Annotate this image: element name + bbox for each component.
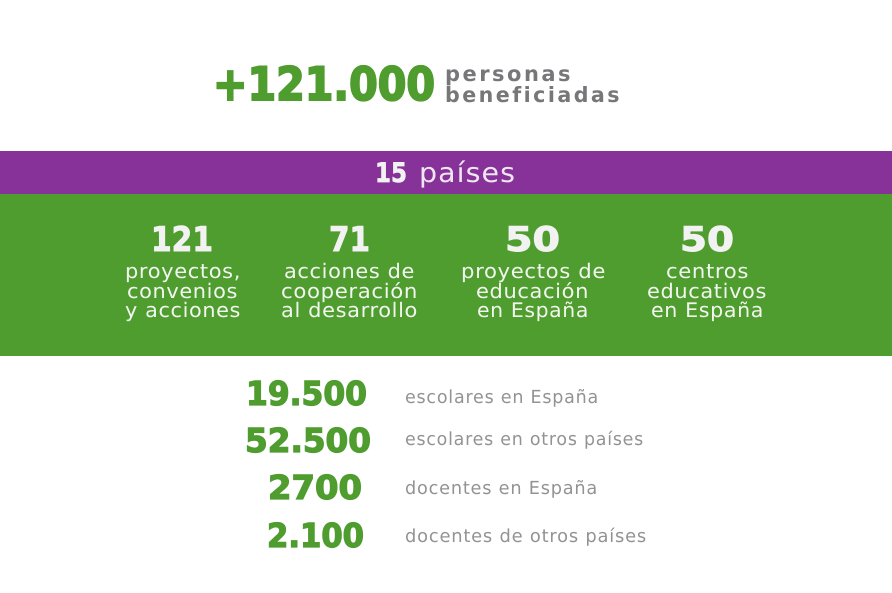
stat: cooperation actions: al desarrollo [281, 298, 418, 322]
stat: cooperation actions: 71 [329, 220, 370, 260]
headline: people benefited [213, 57, 622, 111]
row: schoolchildren abroad [245, 421, 644, 460]
headline caption: beneficiadas [445, 83, 622, 107]
row: teachers in Spain: docentes en España [405, 478, 598, 499]
stat: projects [125, 220, 241, 322]
stat: schools [647, 220, 767, 322]
headline caption [445, 62, 622, 107]
row: teachers abroad: 2.100 [267, 516, 364, 555]
stat: schools: centros [666, 259, 749, 283]
band: countries: países [419, 158, 516, 189]
row: teachers abroad [267, 516, 647, 555]
stat: cooperation actions: cooperación [281, 279, 418, 303]
stat: projects: y acciones [125, 298, 241, 322]
stat: education projects: proyectos de [461, 259, 606, 283]
stat: schools: 50 [680, 220, 734, 260]
row: schoolchildren abroad: escolares en otros países [405, 429, 644, 450]
row: schoolchildren in Spain: 19.500 [246, 374, 367, 413]
stat: education projects: en España [477, 298, 589, 322]
row: schoolchildren in Spain: escolares en España [405, 387, 599, 408]
row: teachers in Spain [268, 468, 598, 507]
list: beneficiaries [245, 374, 647, 555]
stat: projects: proyectos, [125, 259, 241, 283]
headline caption: personas [445, 62, 573, 86]
band: countries [0, 151, 892, 194]
stat: education projects: 50 [505, 220, 560, 260]
stat: education projects: educación [476, 279, 589, 303]
stat: projects: 121 [151, 220, 213, 260]
panel: activity figures [0, 194, 892, 356]
stat: education projects [461, 220, 606, 322]
headline number: +121.000 [213, 57, 435, 111]
stat: cooperation actions [281, 220, 418, 322]
stat: schools: en España [651, 298, 764, 322]
band: countries: 15 [375, 158, 407, 189]
row: teachers abroad: docentes de otros países [405, 526, 647, 547]
stat: cooperation actions: acciones de [284, 259, 415, 283]
stat: schools: educativos [647, 279, 767, 303]
row: schoolchildren in Spain [246, 374, 599, 413]
stat: projects: convenios [127, 279, 238, 303]
row: teachers in Spain: 2700 [268, 468, 362, 507]
row: schoolchildren abroad: 52.500 [245, 421, 371, 460]
